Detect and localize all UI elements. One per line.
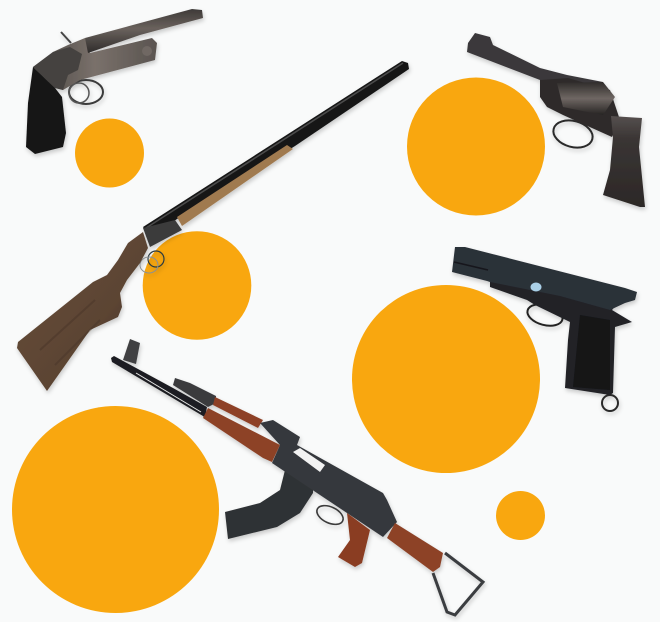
icon: semi-automatic pistol — [452, 247, 637, 411]
circle: small value — [496, 491, 545, 540]
circle: semi-automatic pistol value — [352, 285, 540, 473]
icon: double-barrel shotgun — [17, 61, 409, 391]
circle: revolver value — [407, 78, 545, 216]
icon: flare pistol — [26, 9, 203, 154]
circle: flare pistol value — [75, 118, 144, 188]
icon: revolver — [467, 33, 645, 207]
circle: assault rifle value — [12, 406, 219, 613]
circle: shotgun value — [143, 231, 251, 340]
icon: assault rifle — [111, 339, 483, 615]
